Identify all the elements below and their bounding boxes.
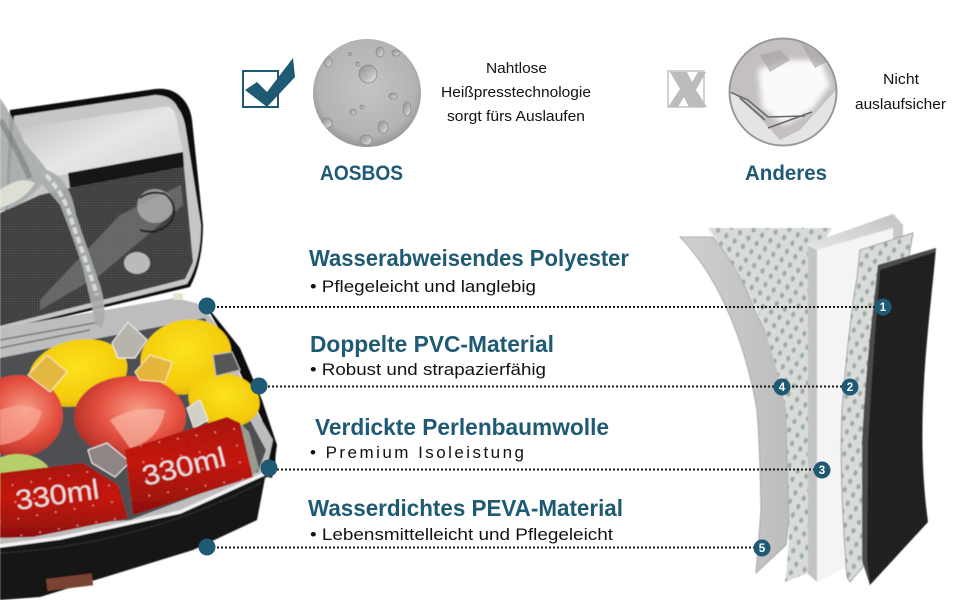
badge 3: 3 — [819, 465, 825, 477]
feature: water-repellent polyester — [309, 245, 629, 296]
can 330ml right: 330ml — [139, 441, 229, 492]
icon: check mark in box — [243, 58, 295, 107]
feature: water-repellent polyester: • Pflegeleicht und langlebig — [310, 277, 536, 296]
text: seamless technology: Heißpresstechnologie — [441, 85, 591, 101]
text: not leakproof: Nicht — [883, 72, 919, 88]
badge 2: 2 — [847, 382, 853, 394]
feature: thick pearl cotton: Verdickte Perlenbaumwolle — [315, 414, 609, 440]
text: not leakproof — [855, 72, 946, 113]
water pouring from jug — [0, 98, 105, 328]
photo: open lunch bag filled with fruit and cans — [0, 89, 277, 600]
lemon — [132, 309, 240, 405]
connector: pearl cotton line — [260, 460, 816, 476]
badge 2 — [842, 378, 858, 396]
layer 2: perforated PVC — [841, 233, 913, 582]
connector: PEVA line — [198, 538, 756, 556]
feature: waterproof PEVA — [308, 495, 623, 544]
bag body base — [0, 304, 277, 600]
feature: waterproof PEVA: Wasserdichtes PEVA-Material — [308, 495, 623, 521]
text: seamless technology — [441, 61, 591, 125]
feature: water-repellent polyester: Wasserabweisendes Polyester — [309, 245, 629, 271]
badge 5 — [754, 540, 770, 556]
text: seamless technology: Nahtlose — [486, 61, 547, 77]
heading: Anderes: Anderes — [745, 162, 827, 185]
icon: cross in box — [668, 71, 707, 107]
feature: waterproof PEVA: • Lebensmittelleicht und Pflegeleicht — [310, 525, 613, 544]
ice cubes — [28, 322, 240, 477]
feature: thick pearl cotton — [310, 414, 609, 462]
badge 4 — [774, 378, 790, 396]
layer 3: pearl cotton foam — [808, 214, 903, 582]
bag lid — [0, 89, 203, 332]
text: not leakproof: auslaufsicher — [855, 97, 946, 113]
bag interior — [0, 293, 273, 546]
connector: polyester line — [198, 298, 876, 314]
feature: double PVC — [310, 331, 554, 379]
badge 1 — [874, 298, 892, 316]
can 330ml left: 330ml — [14, 474, 101, 516]
green apple — [0, 454, 52, 502]
badge 3 — [814, 462, 830, 478]
badge 1: 1 — [880, 302, 887, 314]
badge 5: 5 — [759, 543, 766, 555]
apple — [74, 376, 186, 458]
feature: double PVC: • Robust und strapazierfähig — [310, 360, 546, 379]
layered material diagram — [680, 214, 936, 585]
can 330ml left — [0, 463, 128, 538]
feature: double PVC: Doppelte PVC-Material — [310, 331, 554, 357]
layer 1: black polyester — [862, 248, 936, 585]
can 330ml right — [125, 417, 259, 515]
heading: AOSBOS: AOSBOS — [320, 162, 403, 185]
badge 4: 4 — [779, 382, 786, 394]
feature: thick pearl cotton: • Premium Isoleistung — [310, 443, 524, 462]
icon: water drops on material circle — [313, 39, 421, 147]
layer 4: perforated PVC — [708, 228, 832, 582]
layer 5: PEVA — [680, 237, 789, 573]
connector: PVC line — [250, 378, 844, 394]
icon: foil material circle — [730, 38, 840, 146]
text: seamless technology: sorgt fürs Auslaufen — [447, 109, 585, 125]
lemon — [183, 366, 265, 434]
apple — [0, 375, 63, 457]
lemon — [22, 330, 134, 416]
